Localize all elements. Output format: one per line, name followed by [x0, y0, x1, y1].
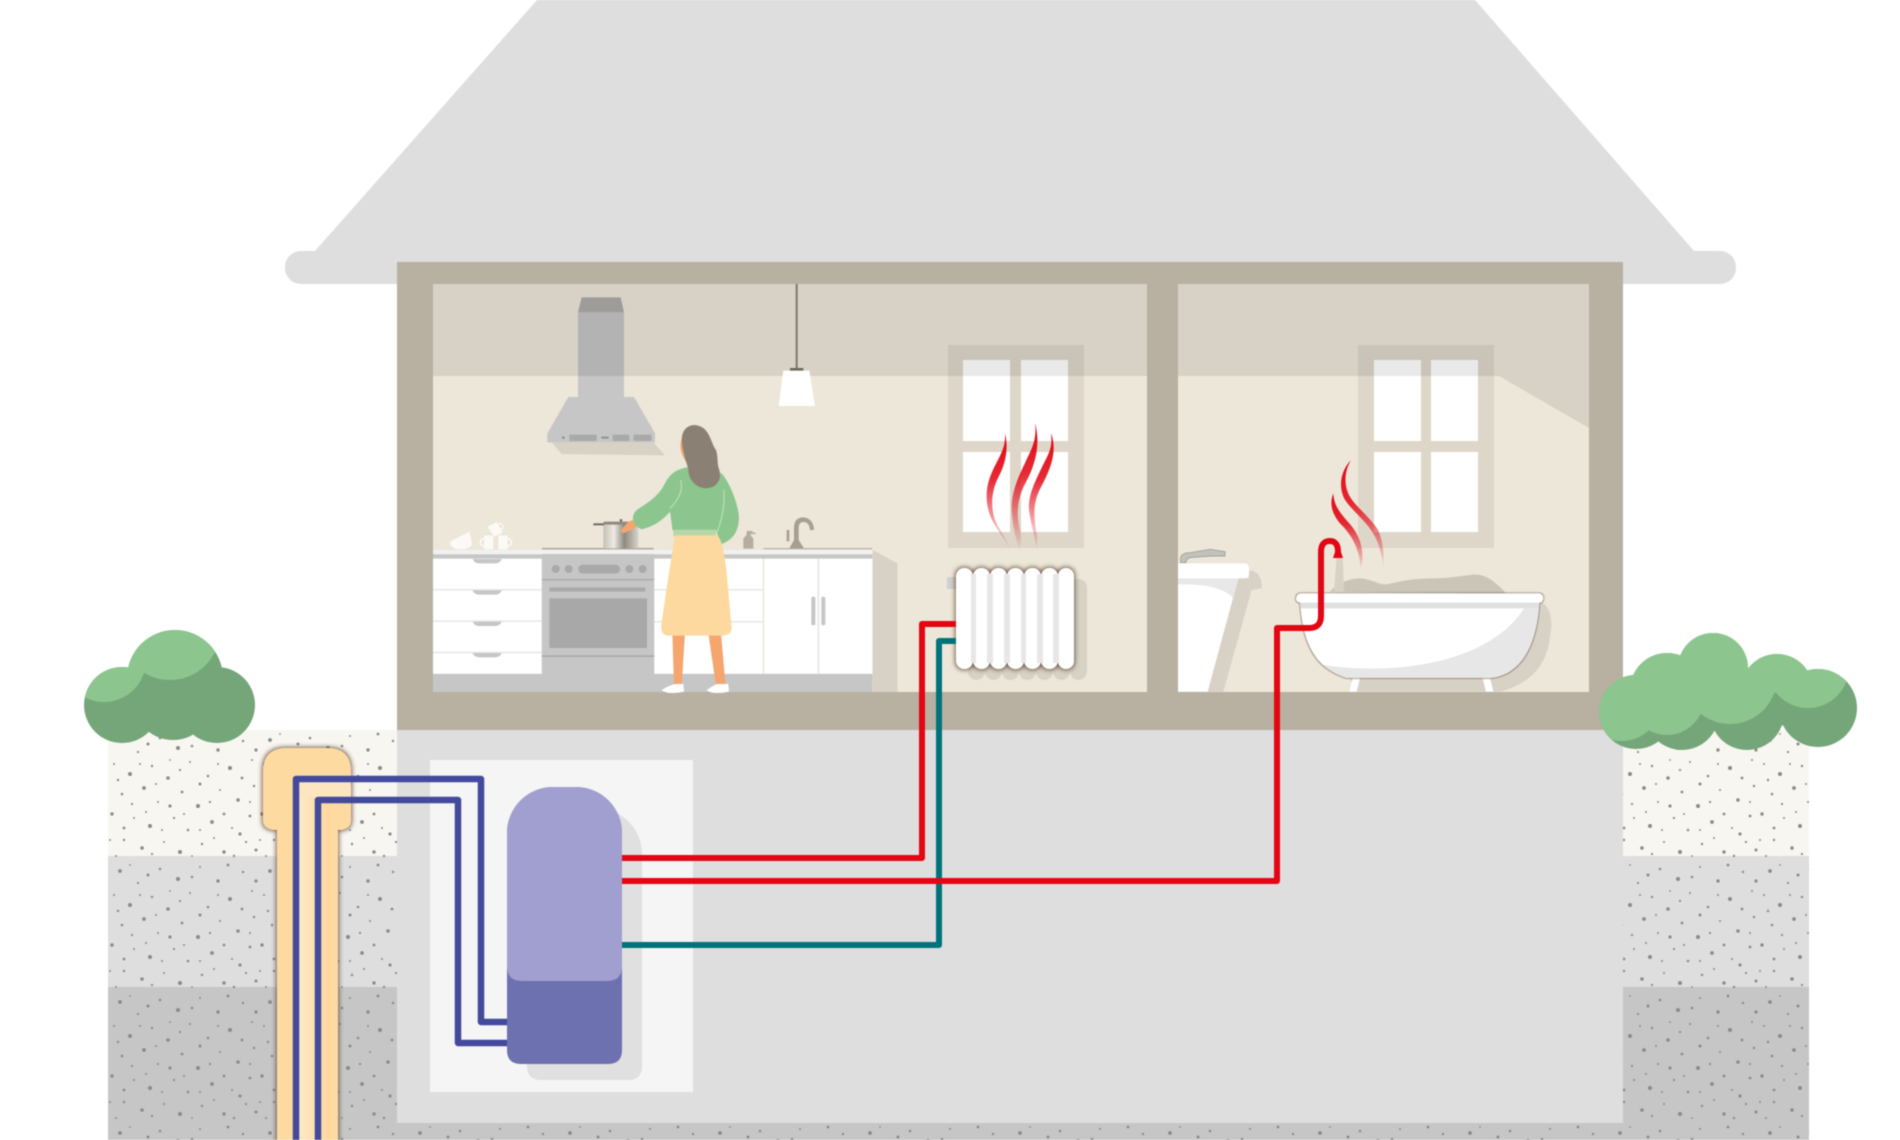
radiator heat waves: [987, 423, 1054, 552]
tank shadow: [527, 808, 642, 1080]
cabinets: [654, 559, 872, 674]
room: bathroom: [1178, 284, 1589, 692]
teal return pipe: [622, 641, 956, 945]
woman: [621, 425, 739, 693]
sink tap and soap: [743, 517, 872, 549]
red hot water pipe to bath: [622, 541, 1343, 881]
pot: [593, 519, 638, 548]
red flow pipe to radiator: [622, 624, 956, 858]
heat pump tank: [507, 787, 622, 1064]
panel: plant room: [430, 760, 693, 1092]
window: kitchen: [948, 345, 1084, 548]
brine pipes: [296, 779, 507, 1140]
kitchen scene: [433, 284, 897, 693]
bush: right: [1598, 632, 1858, 751]
cups: [450, 522, 511, 549]
room: kitchen: [433, 284, 1147, 692]
extractor hood: [547, 297, 665, 455]
ground layers: [108, 730, 1809, 1140]
oven: [542, 548, 654, 692]
bathroom fixtures: [1178, 460, 1551, 692]
bush: left: [83, 629, 256, 744]
drawers: [433, 559, 541, 674]
roof: [285, 0, 1736, 284]
counter: [433, 550, 872, 692]
borehole: [263, 748, 351, 1140]
cabinet side shadow: [873, 550, 897, 692]
basement: [397, 730, 1623, 1123]
window: bathroom: [1358, 345, 1494, 548]
pendant lamp: [779, 284, 815, 406]
bath steam: [1331, 460, 1384, 571]
bathtub: [1296, 557, 1551, 692]
house walls: [397, 262, 1623, 730]
radiator: [947, 568, 1087, 680]
washbasin: [1178, 549, 1262, 692]
